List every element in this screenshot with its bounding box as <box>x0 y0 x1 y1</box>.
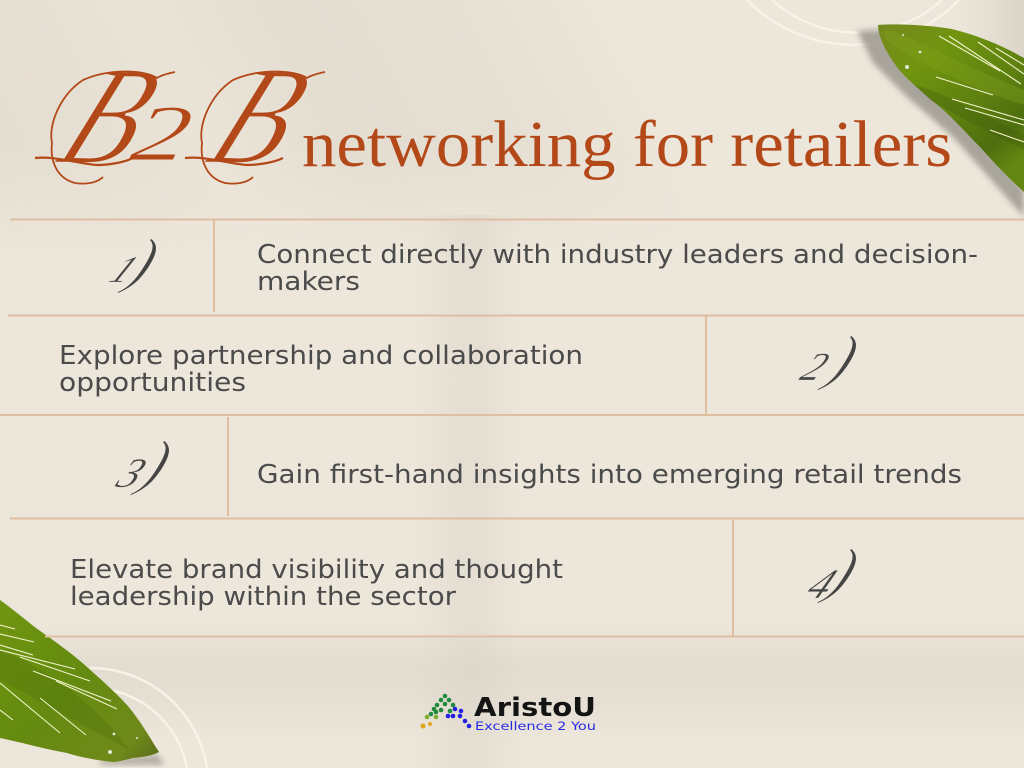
number 2: ) <box>815 324 870 392</box>
decorative rings top right <box>747 0 959 45</box>
row dividers <box>0 220 1024 636</box>
number 4: ) <box>815 537 870 605</box>
row 2 <box>59 324 870 398</box>
text: item 2: opportunities <box>59 368 246 398</box>
title script initials <box>35 38 333 193</box>
text: item 4: leadership within the sector <box>70 582 456 612</box>
logo name: AristoU <box>474 693 596 723</box>
row 1 <box>102 227 978 297</box>
title script initials: B <box>38 38 183 193</box>
icon: leaf top right <box>878 24 1024 192</box>
number 3: 3 <box>108 450 155 496</box>
row 3 <box>108 429 962 497</box>
number 1: ) <box>115 227 170 295</box>
number 3: ) <box>128 429 183 497</box>
row 4 <box>70 537 870 612</box>
text: item 4: Elevate brand visibility and thought <box>70 555 563 585</box>
text: item 1: Connect directly with industry leaders and decision- <box>257 240 978 270</box>
text: item 1: makers <box>257 267 360 297</box>
number 4: 4 <box>799 561 845 607</box>
logo <box>420 693 596 733</box>
decorative rings bottom left <box>90 668 207 768</box>
number 2: 2 <box>793 345 836 389</box>
leaf shadow bottom left <box>100 754 164 765</box>
text: item 2: Explore partnership and collaboration <box>59 341 583 371</box>
title remainder: networking for retailers <box>302 108 952 181</box>
title script initials: B <box>188 38 333 193</box>
number 2 <box>793 324 870 392</box>
number 3 <box>108 429 183 497</box>
icon: leaf bottom left <box>0 600 159 762</box>
leaf shadow top right <box>857 29 1024 217</box>
title <box>35 38 952 193</box>
number 1: 1 <box>102 248 147 290</box>
icon: logo dot pyramid <box>420 694 471 728</box>
text: item 3: Gain first-hand insights into emerging retail trends <box>257 460 962 490</box>
title script initials: 2 <box>124 90 200 178</box>
logo tagline: Excellence 2 You <box>475 719 596 733</box>
